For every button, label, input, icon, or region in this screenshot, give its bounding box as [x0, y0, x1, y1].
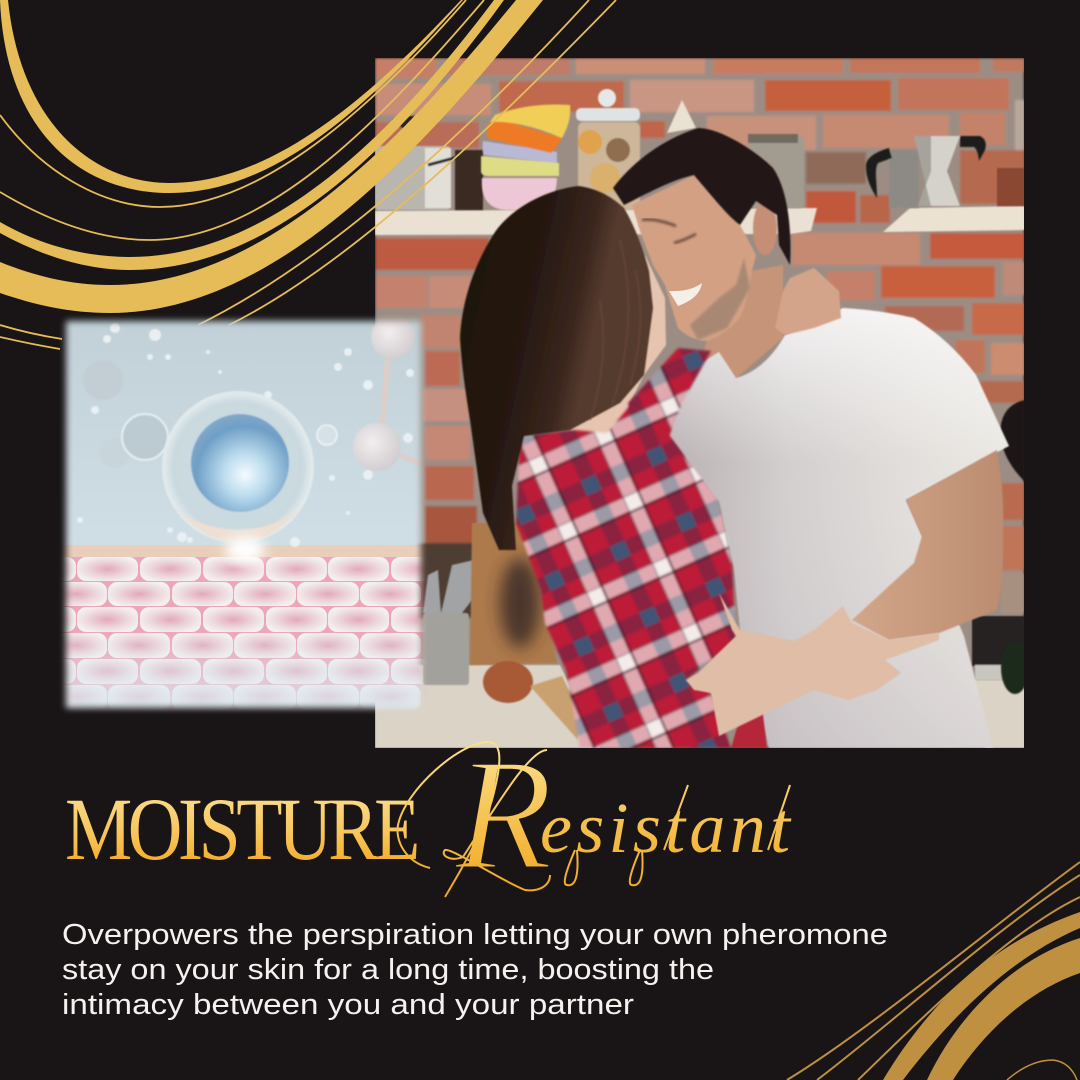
- curve: thick arc: [0, 0, 543, 313]
- cooking pot on shelf: [375, 116, 483, 210]
- man: ear: [753, 201, 777, 255]
- woman: plaid shirt: [516, 403, 736, 748]
- man: face: [632, 175, 756, 341]
- shelf: right: [883, 206, 1025, 232]
- title: MOISTURE: MOISTURE: [65, 779, 420, 878]
- cookie jar: [576, 89, 640, 210]
- wooden board: [530, 676, 580, 740]
- man: closed eye: [642, 220, 696, 243]
- decorative gold curves: bottom right: [787, 862, 1080, 1080]
- man: smile: [669, 283, 702, 306]
- skin cell wall: [60, 557, 426, 714]
- script word: esistant: [540, 788, 792, 868]
- woman: hair: [460, 186, 653, 550]
- line 3: intimacy between you and your partner: [62, 989, 634, 1021]
- woman: raised sleeve: [626, 346, 716, 499]
- skin surface band: [55, 545, 430, 557]
- script word: R: [454, 725, 553, 903]
- line 2: stay on your skin for a long time, boosting the: [62, 954, 714, 986]
- panel: molecule and skin inset: [60, 316, 426, 714]
- onion: [483, 661, 533, 703]
- man: beard shading: [690, 258, 750, 340]
- man: white t-shirt: [669, 308, 1009, 748]
- title script: Resistant: [397, 725, 792, 903]
- woman: cheek and neck: [570, 255, 666, 436]
- curve: tapered inner arc: [0, 0, 463, 193]
- cutting board: [470, 523, 557, 665]
- woman: arm and hand on man: [686, 593, 939, 736]
- man: neck: [700, 265, 783, 378]
- central glass orb: [162, 391, 314, 543]
- curve: thin arcs: [0, 0, 616, 349]
- canister on shelf: [748, 134, 804, 208]
- panel: couple photo: [375, 58, 1029, 748]
- decorative gold curves: top left: [0, 0, 616, 349]
- man: arm and forearm: [852, 450, 1003, 640]
- man: hair: [613, 128, 790, 265]
- woman: cuff edge: [730, 714, 768, 748]
- dark green vegetable: [1000, 642, 1024, 695]
- inset background: [55, 310, 430, 550]
- molecule spheres and droplets: [77, 315, 415, 547]
- curve: thin arcs: [787, 862, 1080, 1080]
- script swashes: [397, 742, 790, 897]
- dark kitchen items at right: [972, 400, 1025, 680]
- small ornament tree: [667, 100, 696, 133]
- curve: medium arc: [883, 912, 1080, 1080]
- molecule connector: [382, 353, 425, 465]
- line 1: Overpowers the perspiration letting your own pheromone: [62, 919, 888, 951]
- curve: small corner arc: [1007, 1060, 1077, 1080]
- brick wall: [375, 58, 1025, 748]
- glow on skin surface: [225, 537, 265, 563]
- shelf: left: [375, 208, 817, 235]
- curve: medium arc: [0, 0, 504, 270]
- utensil tin: [422, 560, 472, 686]
- stacked colourful bowls: [481, 104, 570, 210]
- moka pots: [866, 136, 1025, 208]
- description text: [62, 919, 888, 1021]
- countertop: [375, 665, 1025, 748]
- woman: hand on shoulder: [775, 268, 841, 335]
- curve: thick arc: [927, 938, 1080, 1080]
